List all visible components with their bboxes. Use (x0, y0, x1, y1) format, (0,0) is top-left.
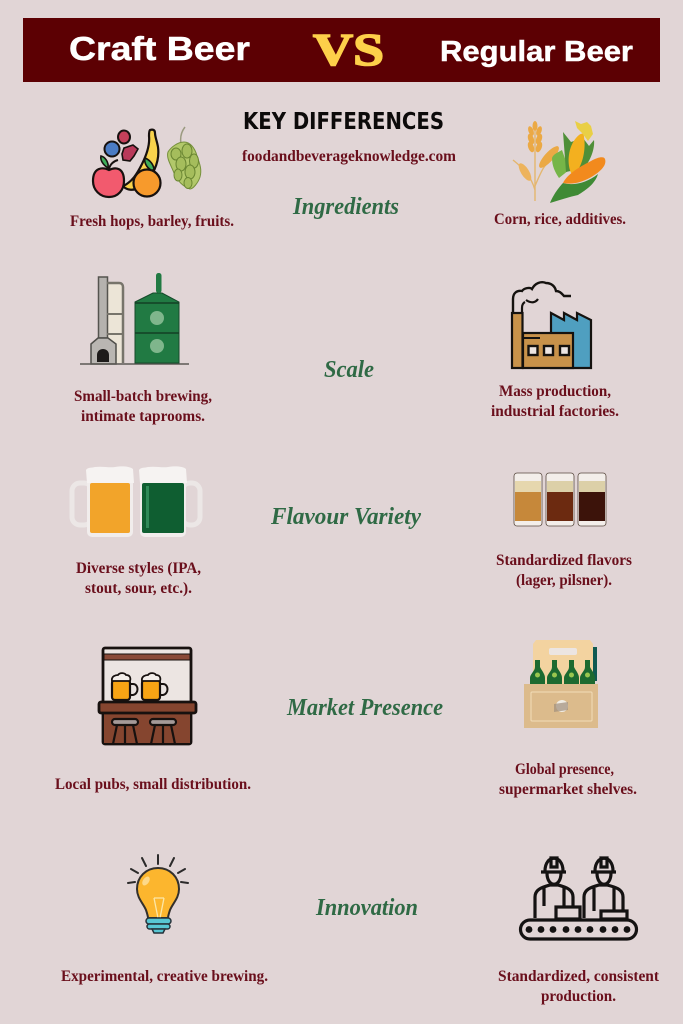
icon: pub bar (99, 648, 196, 744)
caption: flavour regular: (lager, pilsner). (516, 572, 612, 589)
caption: market regular: Global presence, (515, 761, 614, 778)
caption: scale craft: intimate taprooms. (81, 408, 205, 425)
icon: six-pack carrier (524, 640, 598, 728)
caption: scale regular (491, 383, 619, 420)
icon: craft beer mugs (72, 466, 200, 537)
caption: market regular: supermarket shelves. (499, 781, 637, 798)
title: VS: VS (313, 25, 384, 75)
caption: scale craft (74, 388, 212, 425)
category: market presence: Market Presence (286, 695, 443, 721)
category: scale: Scale (324, 357, 374, 383)
icon: fruits and hops (93, 127, 201, 197)
caption: ingredients craft: Fresh hops, barley, fruits. (70, 213, 234, 230)
header banner (23, 18, 660, 82)
category: flavour variety: Flavour Variety (270, 504, 421, 530)
icon: factory (512, 282, 591, 368)
heading: key differences: KEY DIFFERENCES (243, 109, 444, 135)
caption: market craft: Local pubs, small distribution. (55, 776, 251, 793)
caption: flavour craft (76, 560, 201, 597)
caption: flavour craft: stout, sour, etc.). (85, 580, 192, 597)
website text: foodandbeverageknowledge.com (242, 148, 456, 165)
title: Craft Beer: Craft Beer (69, 30, 250, 67)
caption: flavour regular: Standardized flavors (496, 552, 632, 569)
title: Regular Beer: Regular Beer (440, 36, 633, 68)
icon: craft brewery (80, 273, 189, 364)
caption: flavour craft: Diverse styles (IPA, (76, 560, 201, 577)
caption: flavour regular (496, 552, 632, 589)
icon: corn and wheat (513, 121, 605, 203)
caption: market regular (499, 761, 637, 798)
caption: scale regular: Mass production, (499, 383, 611, 400)
caption: innovation craft: Experimental, creative brewing. (61, 968, 268, 985)
category: innovation: Innovation (315, 895, 418, 921)
caption: ingredients regular: Corn, rice, additives. (494, 211, 626, 228)
caption: innovation regular (498, 968, 660, 1005)
icon: light bulb (128, 855, 188, 933)
icon: three regular beers (514, 473, 606, 526)
caption: scale regular: industrial factories. (491, 403, 619, 420)
caption: scale craft: Small-batch brewing, (74, 388, 212, 405)
icon: workers on conveyor (520, 858, 636, 939)
caption: innovation regular: Standardized, consistent (498, 968, 660, 985)
category: ingredients: Ingredients (292, 194, 399, 220)
caption: innovation regular: production. (541, 988, 616, 1005)
